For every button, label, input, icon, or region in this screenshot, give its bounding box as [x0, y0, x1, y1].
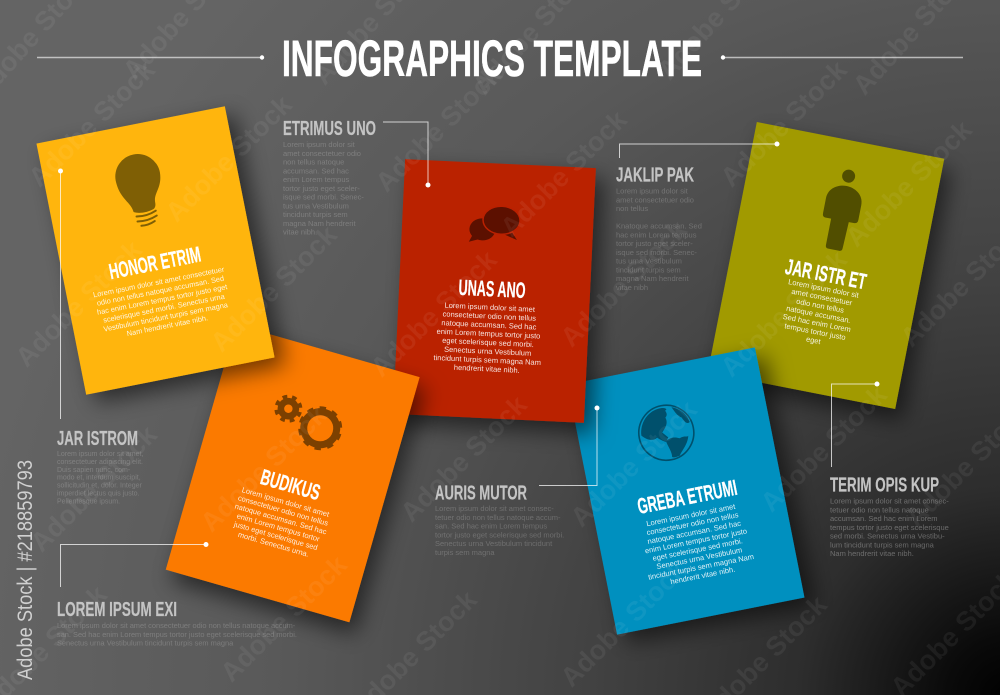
card text: tincidunt turpis sem magna Nam: [433, 353, 541, 367]
watermark: Adobe Stock: [715, 54, 853, 193]
panel: yellow card: [36, 106, 275, 395]
text block: Terim Opis Kup: tempus tortor justo eget scelerisque: [830, 523, 949, 532]
text block: Jaklip Pak: Lorem ipsum dolor sit: [616, 186, 689, 196]
text block: Etrimus Uno: vitae nibh.: [283, 228, 317, 236]
card text: eget scelerisque sed morbi.: [442, 336, 534, 349]
text block: Auris Mutor: Senectus urna Vestibulum tincidunt: [435, 539, 553, 548]
card text: morbi. Senectus urna.: [237, 530, 310, 559]
text block: Jar Istrom: Duis sapien nunc, com-: [57, 467, 131, 474]
watermark: Adobe Stock: [365, 244, 503, 383]
text block: Jaklip Pak: hac enim Lorem tempus: [616, 230, 697, 239]
text block: Etrimus Uno: non tellus natoque: [283, 158, 344, 166]
card text: hendrerit vitae nibh.: [454, 363, 520, 375]
watermark: Adobe Stock: [195, 399, 333, 538]
text block: Auris Mutor: turpis sem magna: [435, 548, 495, 557]
card text: tempus tortor justo: [784, 321, 846, 342]
text block: Terim Opis Kup: TERIM OPIS KUP: [830, 474, 939, 496]
text block: Lorem Ipsum Exi: san. Sed hac enim Lorem tempus tortor justo eget scelerisque sed morbi.: [57, 630, 297, 639]
text block: Jar Istrom: JAR ISTROM: [57, 428, 138, 450]
icon: light bulb: [111, 150, 169, 229]
stock id label: Adobe Stock | #218859793: [14, 460, 37, 680]
text block: Lorem Ipsum Exi: LOREM IPSUM EXI: [57, 599, 177, 621]
connector: olive card to Jaklip Pak: [620, 142, 780, 158]
card title: HONOR ETRIM: [107, 242, 203, 284]
card text: consectetuer odio non tellus: [442, 309, 536, 323]
card text: consectetuer odio non tellus: [237, 493, 329, 528]
card text: enim Lorem tempus tortor justo: [436, 327, 541, 341]
text block: Auris Mutor: tortor justo eget scelerisque sed morbi.: [435, 530, 564, 539]
card text: natoque accumsan. Sed hac: [647, 519, 742, 546]
text block: Etrimus Uno: tortor justo eget sceler-: [283, 184, 360, 193]
text block: Jar Istrom: modo et, interdum suscipit,: [57, 475, 141, 482]
text block: Etrimus Uno: magna Nam hendrerit: [283, 219, 356, 228]
text block: Auris Mutor: AURIS MUTOR: [435, 482, 527, 504]
card text: eget scelerisque sed morbi.: [652, 536, 743, 563]
text block: Etrimus Uno: ETRIMUS UNO: [283, 118, 376, 140]
card text: enim Lorem tempus tortor: [236, 511, 321, 544]
watermark: Adobe Stock: [10, 234, 148, 373]
watermark: Adobe Stock: [555, 214, 693, 353]
text block: Jar Istrom: imperdiet lectus quis justo.: [57, 490, 140, 498]
text block: Jaklip Pak: non tellus: [616, 204, 648, 213]
text block: Etrimus Uno: [283, 118, 376, 236]
text block: Terim Opis Kup: tetuer odio non tellus natoque: [830, 505, 929, 514]
connector: yellow card to Jar Istrom: [58, 168, 63, 419]
title: INFOGRAPHICS TEMPLATE: [282, 30, 702, 87]
text block: Etrimus Uno: accumsan. Sed hac: [283, 166, 349, 175]
card text: odio non tellus natoque accumsan. Sed: [96, 274, 225, 308]
card text: Senectus urna Vestibulum: [656, 545, 743, 571]
connector: orange card to Lorem Ipsum Exi: [60, 542, 208, 587]
card title: JAR ISTR ET: [783, 254, 869, 294]
card text: Lorem ipsum dolor sit amet consectetuer: [92, 265, 226, 299]
watermark: Adobe Stock: [840, 114, 978, 253]
text block: Jar Istrom: consectetuer adipiscing elit.: [57, 459, 143, 466]
card text: natoque accumsan. Sed hac: [234, 502, 328, 536]
text block: Lorem Ipsum Exi: Senectus urna Vestibulum tincidunt turpis sem magna: [57, 638, 234, 648]
card text: consectetuer odio non tellus: [646, 510, 739, 537]
card text: natoque accumsan. Sed hac: [441, 318, 537, 332]
watermark: Adobe Stock: [395, 389, 533, 528]
text block: Jaklip Pak: tortor justo eget sceler-: [616, 239, 693, 248]
watermark: Adobe Stock: [755, 379, 893, 518]
text block: Jar Istrom: Pellentesque ipsum.: [57, 498, 120, 505]
card text: Lorem ipsum dolor sit: [787, 277, 860, 300]
panel: blue card: [568, 347, 804, 635]
watermark: Adobe Stock: [715, 244, 853, 383]
watermark: Adobe Stock: [205, 219, 343, 358]
text block: Jaklip Pak: magna Nam hendrerit: [616, 274, 689, 283]
watermark: Adobe Stock: [25, 419, 163, 558]
card title: BUDIKUS: [258, 464, 323, 505]
connector: red card to Etrimus Uno: [383, 122, 430, 188]
card text: hac enim Lorem tempus tortor justo eget: [96, 282, 228, 317]
text block: Jar Istrom: Lorem ipsum dolor sit amet,: [57, 451, 143, 458]
text block: Auris Mutor: san. Sed hac enim Lorem tempus: [435, 522, 547, 530]
text block: Etrimus Uno: tincidunt turpis sem: [283, 210, 348, 219]
text block: Terim Opis Kup: lum tincidunt turpis sem magna: [830, 540, 935, 549]
watermark: Adobe Stock: [160, 89, 298, 228]
watermark: Adobe Stock: [495, 104, 633, 243]
text block: Lorem Ipsum Exi: Lorem ipsum dolor sit amet consectetuer odio non tellus natoque accum-: [57, 621, 296, 630]
panel: orange card: [166, 325, 420, 622]
card text: Lorem ipsum dolor sit amet: [444, 301, 536, 314]
text block: Lorem Ipsum Exi: [57, 599, 297, 648]
text block: Jaklip Pak: Knatoque accumsan. Sed: [616, 222, 702, 230]
card text: Senectus urna Vestibulum: [444, 345, 531, 358]
panel: olive card: [708, 122, 944, 409]
card text: Lorem ipsum dolor sit amet: [646, 502, 737, 528]
connector: blue card to Auris Mutor: [539, 406, 600, 486]
icon: speech bubbles: [469, 205, 521, 244]
card text: Sed hac enim Lorem: [782, 312, 852, 334]
text block: Jaklip Pak: vitae nibh: [616, 283, 648, 292]
card text: Vestibulum tincidunt turpis sem magna: [103, 300, 229, 334]
card text: Nam hendrerit vitae nibh.: [126, 313, 209, 338]
icon: gears: [269, 394, 345, 452]
text block: Jar Istrom: sollicitudin et, dolor. Integer: [57, 483, 142, 490]
watermark: Adobe Stock: [565, 394, 703, 533]
text block: Terim Opis Kup: sed morbi. Senectus urna Vestibu-: [830, 532, 945, 540]
watermark: Adobe Stock: [23, 54, 161, 193]
text block: Etrimus Uno: isque sed morbi. Senec-: [283, 192, 364, 202]
card text: scelerisque sed morbi. Senectus urna: [102, 292, 226, 325]
text block: Etrimus Uno: enim Lorem tempus: [283, 175, 350, 184]
watermark: Adobe Stock: [370, 59, 508, 198]
icon: person: [817, 166, 868, 253]
card title: GREBA ETRUMI: [635, 475, 739, 519]
text block: Jaklip Pak: isque sed morbi. Senec-: [616, 248, 697, 257]
card text: enim Lorem tempus tortor justo: [644, 526, 748, 555]
connector: olive card to Terim Opis Kup: [832, 382, 880, 467]
text block: Terim Opis Kup: Nam hendrerit vitae nibh.: [830, 549, 914, 558]
card text: amet consectetuer: [791, 287, 853, 308]
text block: Etrimus Uno: amet consectetuer odio: [283, 149, 361, 158]
card text: natoque accumsan.: [785, 304, 851, 325]
text block: Jaklip Pak: amet consectetuer odio: [616, 195, 694, 204]
text block: Etrimus Uno: tus urna Vestibulum: [283, 201, 349, 210]
text block: Etrimus Uno: Lorem ipsum dolor sit: [283, 140, 356, 149]
watermark: Adobe Stock: [215, 549, 353, 688]
text block: Jaklip Pak: tincidunt turpis sem: [616, 265, 681, 274]
text block: Jaklip Pak: JAKLIP PAK: [616, 164, 694, 186]
card text: odio non tellus: [796, 297, 845, 315]
panel: red card: [393, 159, 596, 423]
card text: tincidunt turpis sem magna Nam: [647, 552, 755, 582]
text block: Auris Mutor: [435, 482, 564, 557]
text block: Jaklip Pak: [616, 164, 702, 292]
text block: Jar Istrom: [57, 428, 143, 505]
card title: UNAS ANO: [458, 275, 526, 303]
card text: justo eget scelerisque sed: [232, 519, 319, 552]
icon: globe: [634, 400, 699, 465]
card text: Lorem ipsum dolor sit amet: [241, 485, 331, 519]
text block: Auris Mutor: tetuer odio non tellus natoque accum-: [435, 513, 561, 522]
text block: Terim Opis Kup: accumsan. Sed hac enim Lorem: [830, 514, 938, 523]
text block: Terim Opis Kup: Lorem ipsum dolor sit amet consec-: [830, 496, 949, 506]
watermark: Adobe Stock: [555, 554, 693, 693]
card text: eget: [805, 334, 822, 346]
text block: Auris Mutor: Lorem ipsum dolor sit amet consec-: [435, 504, 554, 513]
text block: Terim Opis Kup: [830, 474, 949, 558]
text block: Jaklip Pak: tus urna Vestibulum: [616, 256, 682, 266]
card text: hendrerit vitae nibh.: [670, 565, 736, 586]
